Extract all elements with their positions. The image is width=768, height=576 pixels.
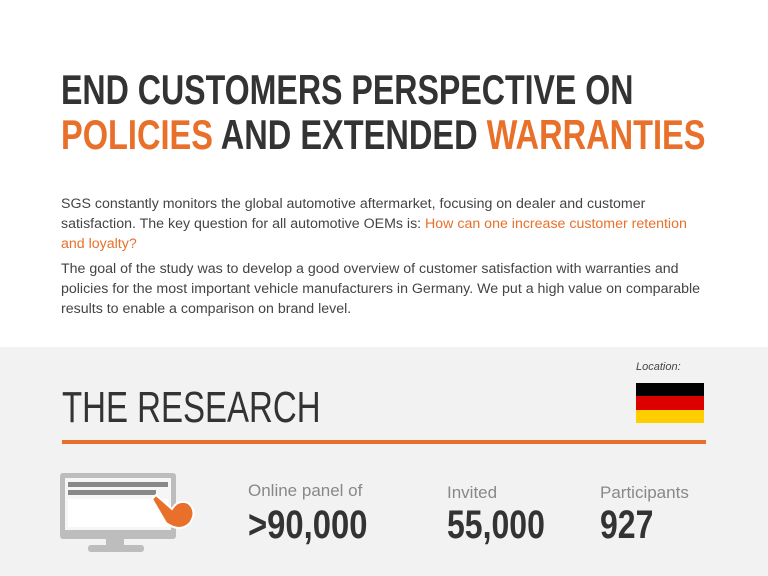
stat: panel [248,481,367,547]
icon: german flag [636,383,704,423]
stat: panel: Online panel of [248,481,362,500]
stat: participants [600,483,689,547]
stat: invited: Invited [447,483,497,502]
stat: participants: 927 [600,503,653,547]
intro text: The goal of the study was to develop a good overview of customer satisfaction with warranties and policies for the most important vehicle manufacturers in Germany. We put a high value on comparable results to enable a comparison on brand level. [61,261,700,317]
intro text: SGS constantly monitors the global automotive aftermarket, focusing on dealer and customer satisfaction. The key question for all automotive OEMs is: How can one increase customer retention and loyalty? [61,196,687,252]
stat: panel: >90,000 [248,503,367,547]
stat: participants: Participants [600,483,689,502]
title: END CUSTOMERS PERSPECTIVE ON [61,66,633,113]
intro text [61,196,700,317]
heading: THE RESEARCH [62,383,321,432]
icon: monitor [60,473,194,552]
title [61,66,705,158]
stat: invited: 55,000 [447,503,545,547]
panel: research [0,347,768,576]
location label: Location: [636,361,681,373]
stat: invited [447,483,545,547]
title: POLICIES AND EXTENDED WARRANTIES [61,111,705,158]
